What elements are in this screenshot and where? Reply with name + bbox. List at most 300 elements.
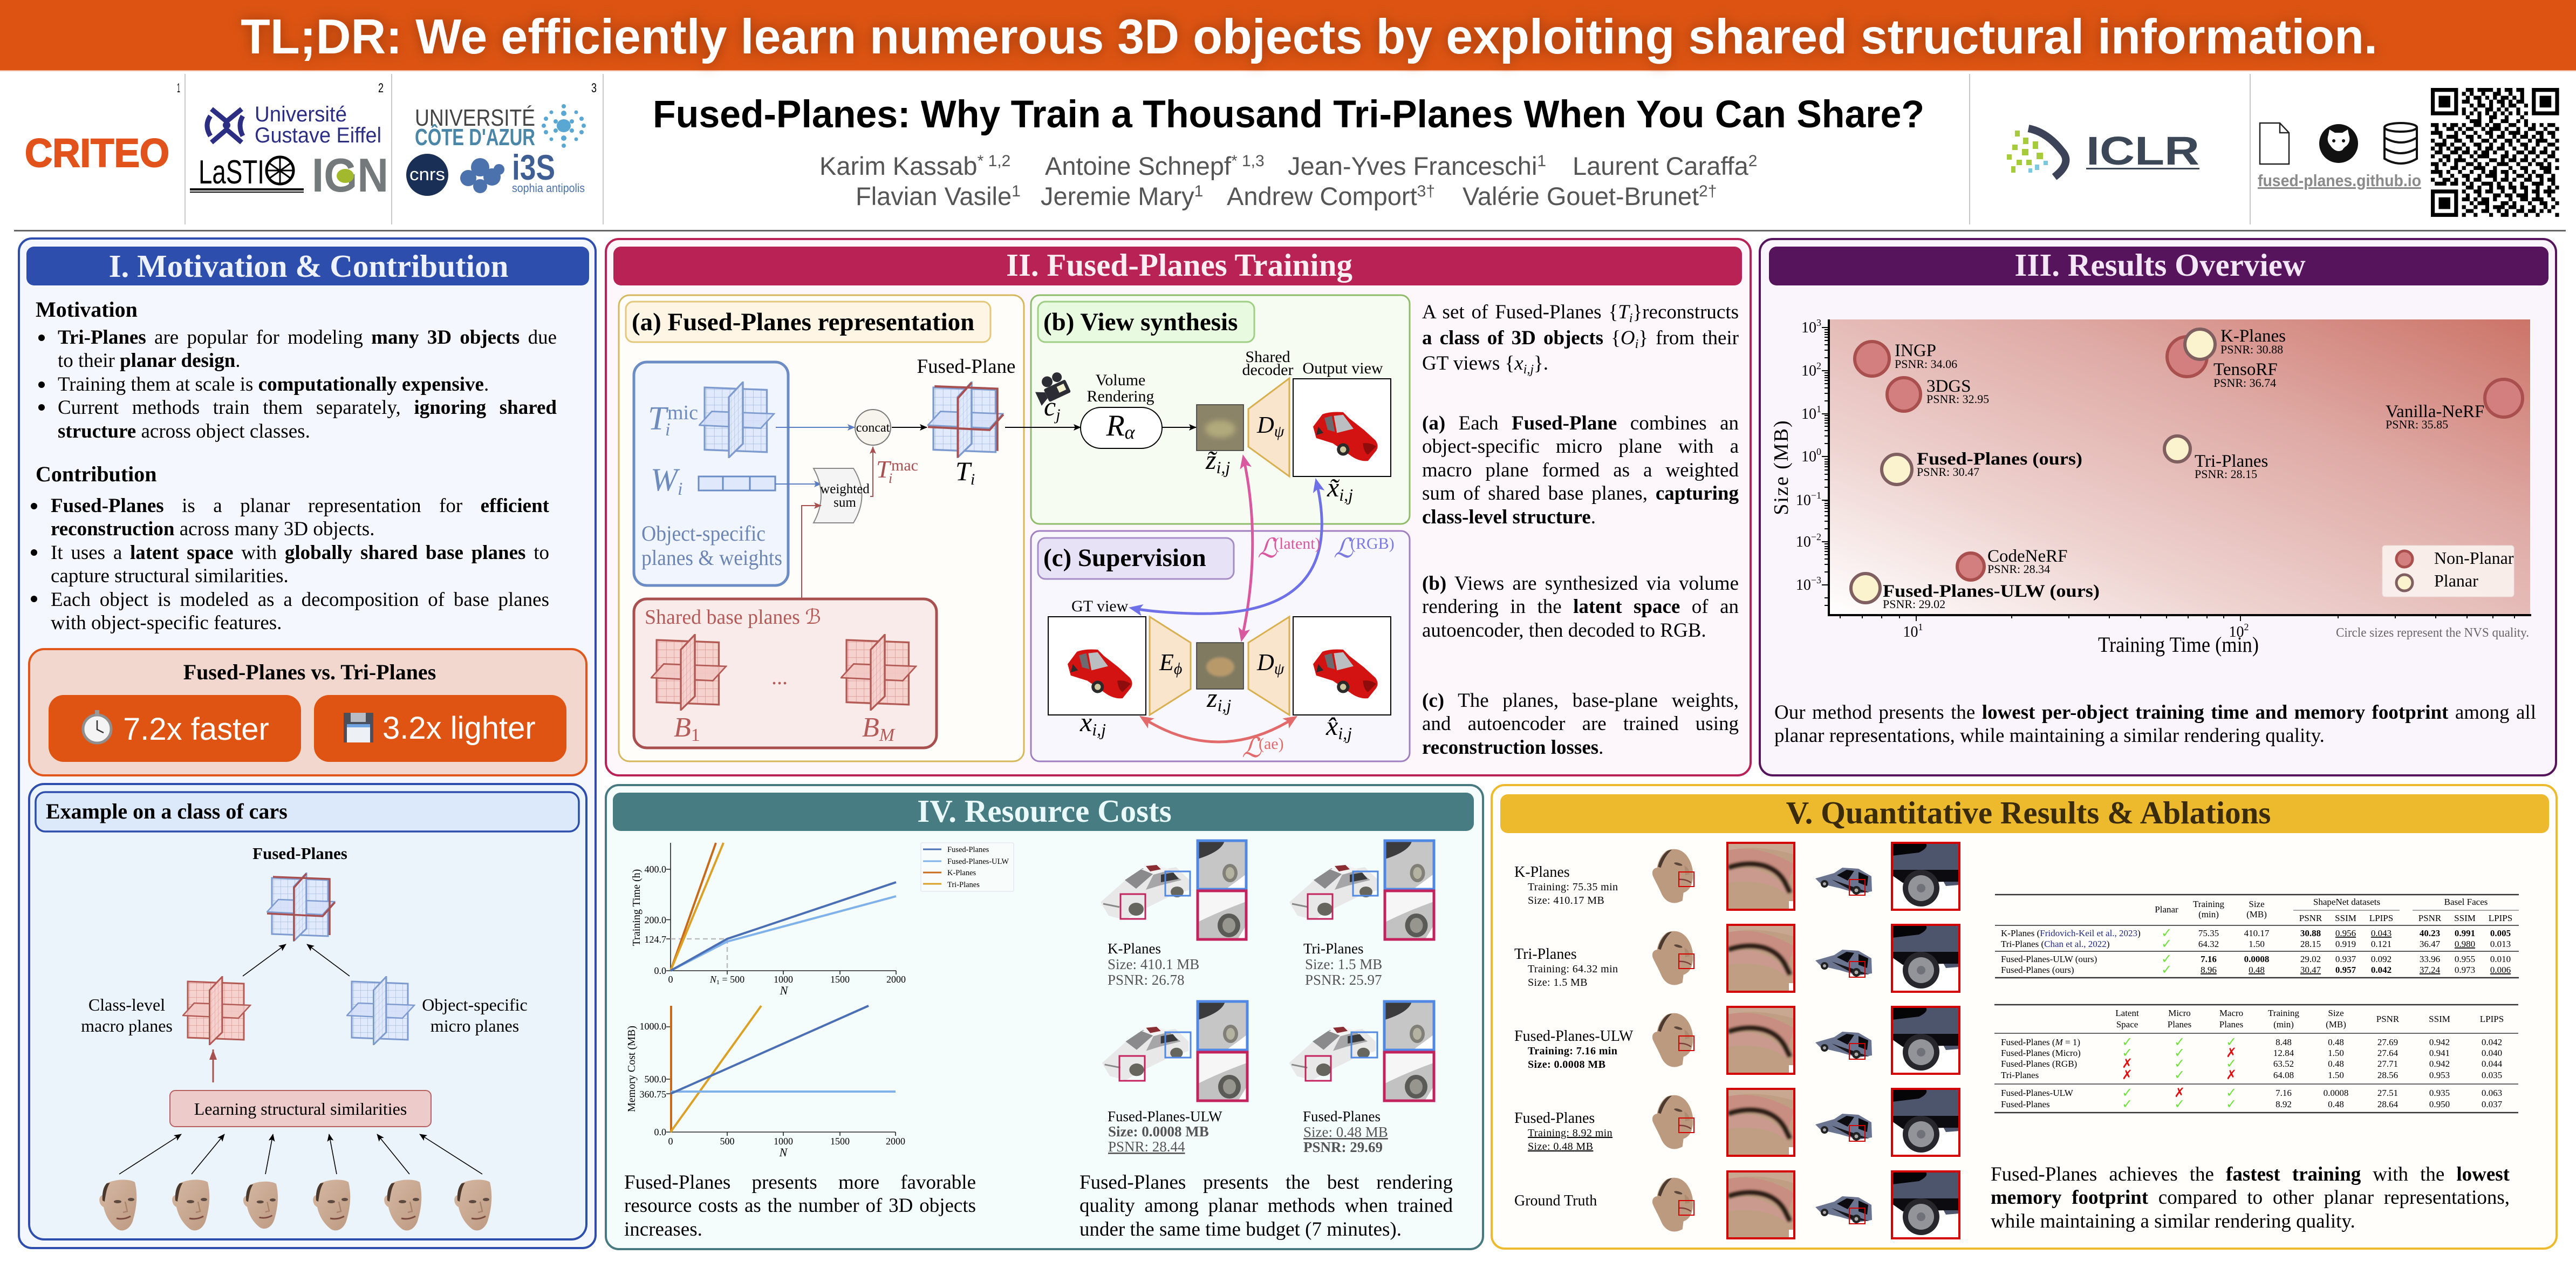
chart: training time: 200.0 (644, 915, 666, 925)
text block: contribution: It uses a latent space with globally shared base planes to (51, 542, 549, 564)
table: planar comparison: 8.96 (2201, 965, 2217, 975)
text block: rendering quality (1079, 1171, 1453, 1243)
row: Fused-Planes-ULW: Fused-Planes-ULW (1514, 1028, 1634, 1045)
box: object-specific planes and weights (634, 362, 788, 585)
text block: (a): sum of shared base planes, capturing (1422, 482, 1739, 505)
chart: memory cost: 1000 (774, 1136, 793, 1147)
arrow: base planes to sum (802, 506, 821, 598)
label: Fused-Plane: Fused-Plane (917, 356, 1015, 378)
shape: encoder (1150, 617, 1191, 715)
label: object-specific micro planes: micro planes (431, 1016, 519, 1035)
renders: Fused-Planes: PSNR: 29.69 (1303, 1139, 1383, 1155)
row: Fused-Planes: Training: 8.92 min (1528, 1127, 1612, 1139)
table: ablations: Fused-Planes-ULW (2001, 1088, 2074, 1098)
box: shared base planes: B (674, 712, 691, 743)
text block: contribution: capture structural similarities. (51, 565, 289, 587)
renders: K-Planes: K-Planes (1108, 940, 1161, 957)
scatter chart (1770, 317, 2531, 657)
table: ablations: ✗ (2226, 1045, 2237, 1060)
text block: motivation: Training them at scale is computationally expensive. (58, 373, 489, 396)
node: R alpha: α (1125, 421, 1136, 443)
table: ablations: ✓ (2226, 1056, 2237, 1071)
text block: quantitative summary: memory footprint compared to other planar representations, (1991, 1187, 2510, 1209)
x axis tick labels (1903, 622, 2249, 640)
renders: Fused-Planes-ULW: Size: 0.0008 MB (1108, 1123, 1209, 1140)
table: ablations: ✓ (2226, 1085, 2237, 1100)
label: T_i: i (971, 471, 975, 488)
text block: motivation (36, 297, 557, 446)
heading: (a): (a) Fused-Planes representation (632, 308, 974, 336)
label: object-specific micro planes: Object-specific (422, 995, 528, 1014)
y axis tick labels: 0 (1816, 446, 1821, 457)
y axis tick labels: 2 (1816, 360, 1821, 371)
label: AE loss: ℒ (1242, 733, 1262, 763)
logo: Criteo: CRITEO (25, 131, 169, 175)
chart: training time: 0 (668, 974, 673, 985)
shape: decoder (1248, 617, 1289, 715)
label: latent loss: ℒ (1258, 533, 1277, 563)
label: class-level macro planes (81, 995, 173, 1035)
box: learning structural similarities (170, 1090, 431, 1127)
box: object-specific planes and weights: mic (667, 401, 698, 424)
table: ablations: 12.84 (2273, 1048, 2294, 1058)
label: T_i: T (955, 456, 971, 486)
legend: Non-Planar (2434, 548, 2514, 568)
authors: 1 (1194, 182, 1203, 200)
authors: 1 (1012, 182, 1021, 200)
table: planar comparison: Size (2249, 899, 2265, 909)
row: Fused-Planes: Size: 0.48 MB (1528, 1141, 1593, 1153)
table: ablations: 0.941 (2429, 1048, 2450, 1058)
chart: training time: 124.7 (644, 934, 666, 945)
table: planar comparison: 28.15 (2300, 939, 2321, 949)
heading: section I: I. Motivation & Contribution (109, 248, 508, 284)
text block: (a): class-level structure. (1422, 506, 1596, 528)
text block: resource costs: Fused-Planes presents more favorable (624, 1171, 976, 1194)
text block: motivation: to their planar design. (58, 350, 241, 372)
text block: (b): autoencoder, then decoded to RGB. (1422, 619, 1706, 642)
sub-panel: (b) view synthesis (1005, 295, 1410, 524)
box: shared base planes: ... (771, 665, 788, 689)
table: ablations: 27.51 (2377, 1088, 2398, 1098)
table: planar comparison: SSIM (2335, 913, 2356, 923)
point labels: PSNR: 28.15 (2195, 467, 2257, 481)
text block: overview: a class of 3D objects {Oi} from their (1422, 327, 1739, 351)
table: planar comparison: 75.35 (2198, 928, 2219, 938)
renders: Fused-Planes-ULW: PSNR: 28.44 (1108, 1139, 1185, 1155)
table: planar comparison: Planar (2155, 904, 2178, 915)
text block: (a): macro plane formed as a weighted (1422, 459, 1739, 481)
text block: (a): object-specific micro plane with a (1422, 435, 1739, 458)
chart: training time: 0.0 (654, 965, 666, 976)
text block: quantitative summary (1991, 1163, 2510, 1235)
table: ablations: 0.037 (2482, 1099, 2503, 1109)
point labels: Fused-Planes (ours) (1917, 449, 2082, 469)
renders: Tri-Planes: Tri-Planes (1303, 940, 1364, 957)
label: latent loss: (latent) (1274, 535, 1321, 553)
table: planar comparison: 30.47 (2300, 965, 2321, 975)
table: planar comparison: 0.0008 (2244, 954, 2269, 964)
logo: Université Côte d'Azur, CNRS, I3S: UNIVERSITÉ (415, 105, 535, 131)
box: shared base planes: M (879, 725, 896, 745)
chart: memory cost: 0 (668, 1136, 673, 1147)
arrow: latent loss (1242, 458, 1253, 639)
table: planar comparison: ✓ (2161, 962, 2172, 977)
table: ablations: ✓ (2122, 1034, 2133, 1049)
icon: micro plane (347, 977, 414, 1045)
chart: training time: N (709, 974, 717, 985)
text block: contribution (31, 462, 549, 637)
heading: (a) (626, 302, 990, 342)
table: ablations: 27.64 (2377, 1048, 2399, 1058)
label: x tilde: i,j (1339, 485, 1353, 505)
text block: overview: A set of Fused-Planes {Ti}reconstructs (1422, 301, 1739, 325)
chart: memory cost: 500 (720, 1136, 735, 1147)
table: ablations: 0.063 (2482, 1088, 2502, 1098)
legend: line styles: Fused-Planes (947, 846, 989, 854)
text block: results summary: planar representations, while maintaining a similar rendering quality. (1774, 725, 2325, 747)
label: c_j: j (1054, 406, 1061, 424)
table: ablations: ✓ (2122, 1096, 2133, 1112)
button: 3.2x lighter: 3.2x lighter (382, 711, 536, 746)
text: 1 (177, 81, 180, 96)
chart: training time: 2000 (886, 974, 906, 985)
table: planar comparison: (min) (2198, 909, 2219, 919)
table: planar comparison: 0.955 (2455, 954, 2475, 964)
box: object-specific planes and weights: T (648, 400, 669, 437)
legend (2382, 546, 2514, 597)
sub-panel: (a) representation (619, 295, 1024, 761)
box: shared base planes (634, 599, 937, 748)
y axis tick labels: −2 (1811, 531, 1821, 542)
renders: Fused-Planes: Size: 0.48 MB (1303, 1124, 1388, 1140)
y axis tick labels: 1 (1816, 404, 1821, 414)
renders: Tri-Planes: Size: 1.5 MB (1305, 956, 1382, 972)
table: ablations: 64.08 (2273, 1070, 2294, 1080)
shape: encoder: ϕ (1174, 660, 1182, 678)
row: Ground Truth (1514, 1171, 1959, 1238)
text block: (b): rendering in the latent space of an (1422, 596, 1739, 618)
label: volume rendering: Volume (1096, 371, 1145, 389)
y axis tick labels: 10 (1801, 448, 1816, 465)
renders: K-Planes: PSNR: 26.78 (1108, 972, 1185, 988)
node: R alpha: R (1106, 409, 1125, 442)
text block: (c) (1422, 689, 1739, 761)
table: ablations: ✗ (2226, 1067, 2237, 1082)
table: planar comparison: 0.957 (2335, 965, 2356, 975)
logo: Université Côte d'Azur, CNRS, I3S: i3S (512, 147, 555, 187)
table: planar comparison: Basel Faces (2444, 897, 2488, 907)
node: concat: concat (856, 421, 890, 435)
point labels: TensoRF (2213, 360, 2278, 379)
x axis tick labels: 10 (2229, 624, 2244, 640)
heading: section III (1769, 247, 2548, 285)
table: planar comparison: 0.042 (2371, 965, 2391, 975)
y axis tick labels: 10 (1796, 492, 1811, 509)
table: ablations: Micro (2168, 1008, 2191, 1018)
box: shared base planes: B (862, 712, 879, 743)
table: ablations: Latent (2115, 1008, 2139, 1018)
authors: Karim Kassab (819, 152, 978, 180)
label: x tilde: x̃ (1327, 472, 1339, 502)
table: planar comparison: 0.980 (2455, 939, 2475, 949)
logo: Université Gustave Eiffel, LaSTIG, IGN: Gustave Eiffel (255, 124, 381, 147)
table: ablations: 0.042 (2482, 1037, 2502, 1047)
y axis title: Size (MB) (1770, 419, 1793, 515)
text block: results summary (1774, 701, 2536, 751)
text block: contribution: reconstruction across many 3D objects. (51, 518, 374, 540)
box: object-specific planes and weights: i (665, 420, 670, 440)
table: ablations: 8.48 (2276, 1037, 2292, 1047)
label: GT view: GT view (1071, 597, 1129, 615)
point labels: PSNR: 36.74 (2213, 376, 2276, 390)
authors: 3† (1417, 182, 1435, 200)
chart: memory cost: 1500 (830, 1136, 850, 1147)
arrow: weights to sum (775, 483, 821, 485)
shape: encoder: E (1159, 649, 1174, 676)
table: planar comparison: 0.919 (2335, 939, 2356, 949)
table: planar comparison: 30.88 (2300, 928, 2321, 938)
label: T mac: T (876, 455, 892, 483)
label: AE loss (1242, 733, 1284, 763)
heading: section II: II. Fused-Planes Training (1006, 247, 1352, 283)
point labels: PSNR: 29.02 (1883, 597, 1945, 611)
point labels (1883, 326, 2484, 611)
row: K-Planes: Size: 410.17 MB (1528, 895, 1604, 906)
y axis tick labels: 10 (1801, 406, 1816, 422)
label: RGB loss (1334, 533, 1395, 563)
table: planar comparison: PSNR (2418, 913, 2442, 923)
table: ablations: Fused-Planes (Micro) (2001, 1048, 2081, 1058)
table: ablations: LPIPS (2480, 1014, 2504, 1024)
logo: ICLR (2007, 128, 2199, 177)
box: learning structural similarities: Learning structural similarities (194, 1099, 407, 1119)
text block: resource costs (624, 1171, 976, 1243)
node: weighted sum: weighted (820, 482, 870, 496)
image: rendered latent (1197, 405, 1243, 451)
logo: Criteo (25, 81, 180, 175)
table: ablations: 0.942 (2429, 1037, 2450, 1047)
logo: Université Gustave Eiffel, LaSTIG, IGN: IGN (312, 148, 388, 202)
table: planar comparison: 1.50 (2249, 939, 2265, 949)
table: planar comparison: ✓ (2161, 936, 2172, 951)
faces (99, 1180, 491, 1230)
table: planar comparison: (MB) (2246, 909, 2267, 919)
node: weighted sum (814, 468, 870, 523)
QR code (2431, 90, 2559, 215)
table: ablations (1994, 1005, 2518, 1113)
table: ablations: 28.64 (2377, 1099, 2399, 1109)
image: reconstructed car (1293, 617, 1391, 715)
panel: III. Results Overview (1760, 239, 2556, 775)
table: ablations: 8.92 (2276, 1099, 2292, 1109)
table: ablations: 0.48 (2328, 1099, 2344, 1109)
arrow: micro to concat (776, 427, 855, 428)
text block: (b) (1422, 572, 1739, 644)
text block: contribution: with object-specific features. (51, 612, 282, 634)
chart: memory cost: 500.0 (644, 1074, 666, 1085)
arrow head (209, 1049, 217, 1060)
point labels: PSNR: 34.06 (1895, 357, 1957, 371)
legend: line styles (921, 843, 1014, 891)
text block: results summary: Our method presents the lowest per-object training time and memory footprint among all (1774, 701, 2536, 724)
label: shared decoder (1242, 348, 1293, 379)
y axis tick labels: 10 (1796, 577, 1811, 594)
table: planar comparison: ShapeNet datasets (2313, 897, 2380, 907)
text block: (b): (b) Views are synthesized via volume (1422, 572, 1739, 595)
text block: overview: GT views {xi,j}. (1422, 352, 1548, 377)
table: planar comparison: 37.24 (2420, 965, 2441, 975)
point labels: PSNR: 30.88 (2220, 343, 2283, 356)
chart: training time: 1 (716, 978, 720, 986)
table: ablations: (min) (2273, 1019, 2294, 1030)
table: planar comparison: 0.043 (2371, 928, 2391, 938)
renders: Fused-Planes (1289, 1001, 1434, 1155)
row: Tri-Planes: Size: 1.5 MB (1528, 977, 1588, 989)
table: planar comparison: 0.991 (2455, 928, 2475, 938)
x axis title: Training Time (min) (2098, 632, 2259, 657)
table: ablations: ✓ (2226, 1034, 2237, 1049)
text block: motivation: Tri-Planes are popular for modeling many 3D objects due (58, 326, 557, 349)
label: class-level macro planes: macro planes (81, 1016, 173, 1035)
note: circle sizes: Circle sizes represent the NVS quality. (2336, 626, 2529, 640)
arrow: RGB loss (1132, 481, 1322, 614)
label: x_ij: i,j (1092, 720, 1106, 739)
TL;DR banner (0, 0, 2576, 71)
logo: Université Gustave Eiffel, LaSTIG, IGN (190, 81, 388, 202)
table: planar comparison: Fused-Planes-ULW (ours) (2001, 954, 2097, 964)
table: planar comparison: Tri-Planes (Chan et al., 2022) (2001, 939, 2109, 949)
label: class-level macro planes: Class-level (88, 995, 165, 1014)
chart: memory cost: 0.0 (654, 1127, 666, 1137)
header dividers and rule (185, 74, 2250, 224)
point labels: K-Planes (2220, 326, 2286, 346)
label: Fused-Planes: Fused-Planes (252, 844, 347, 863)
table: ablations: ✓ (2174, 1045, 2185, 1060)
table: planar comparison: LPIPS (2489, 913, 2512, 923)
panel: example on a class of cars (29, 784, 586, 1239)
chart: memory cost: 2000 (886, 1136, 905, 1147)
non-planar points (1855, 337, 2523, 580)
row: K-Planes: K-Planes (1514, 864, 1570, 881)
label: RGB loss: ℒ (1334, 533, 1354, 563)
point labels: PSNR: 35.85 (2386, 418, 2448, 431)
heading: section IV (613, 793, 1474, 831)
table: ablations: 0.942 (2429, 1059, 2450, 1069)
text block: (c): reconstruction losses. (1422, 737, 1603, 759)
y axis tick labels: −1 (1811, 490, 1821, 501)
table: planar comparison: 0.48 (2249, 965, 2265, 975)
image: GT view car (1048, 617, 1146, 715)
point labels: 3DGS (1926, 377, 1971, 396)
text block: rendering quality: Fused-Planes presents the best rendering (1079, 1171, 1453, 1194)
text block: overview (1422, 299, 1739, 378)
authors: Laurent Caraffa (1573, 152, 1748, 180)
text block: contribution: Contribution (36, 462, 156, 486)
icon: macro plane (183, 977, 250, 1045)
table: planar comparison: 33.96 (2420, 954, 2440, 964)
point labels: Tri-Planes (2195, 452, 2268, 471)
arrow: concat to plane (892, 427, 927, 428)
arrow: renderer to latent (1162, 427, 1196, 428)
authors: Jeremie Mary (1041, 182, 1194, 210)
image: output view car (1293, 379, 1391, 476)
button: 3.2x lighter (314, 695, 566, 762)
table: ablations: ✓ (2122, 1045, 2133, 1060)
project link: fused-planes.github.io (2258, 171, 2421, 190)
table: planar comparison: 40.23 (2420, 928, 2440, 938)
sub-panel: (c) supervision (1031, 531, 1410, 761)
icon: github (2319, 124, 2358, 163)
table: planar comparison: 0.010 (2490, 954, 2511, 964)
chart: training time: 1500 (830, 974, 850, 985)
callout: Fused-Planes vs. Tri-Planes (29, 649, 586, 775)
authors: Andrew Comport (1227, 182, 1417, 210)
chart: memory cost: Memory Cost (MB) (626, 1026, 638, 1112)
x axis tick labels: 1 (1918, 622, 1923, 632)
table: planar comparison: 0.013 (2490, 939, 2511, 949)
callout: Fused-Planes vs. Tri-Planes: Fused-Planes vs. Tri-Planes (183, 660, 436, 684)
table: planar comparison: 7.16 (2201, 954, 2217, 964)
table: planar comparison: 29.02 (2300, 954, 2321, 964)
table: ablations: 7.16 (2276, 1088, 2292, 1098)
renders: Tri-Planes (1289, 841, 1434, 988)
authors: * 1,2 (978, 152, 1010, 170)
table: ablations: 1.50 (2328, 1048, 2344, 1058)
text block: (c): (c) The planes, base-plane weights, (1422, 690, 1739, 712)
logo: Université Côte d'Azur, CNRS, I3S: 3 (591, 81, 597, 96)
table: ablations: ✓ (2226, 1096, 2237, 1112)
label: output view: Output view (1302, 359, 1383, 377)
label: T mac (876, 455, 918, 486)
icon: fused plane (928, 382, 1003, 458)
table: planar comparison: ✓ (2161, 951, 2172, 966)
y axis tick labels: 3 (1816, 317, 1821, 328)
label: AE loss: (ae) (1259, 735, 1284, 753)
table: ablations: 63.52 (2273, 1059, 2294, 1069)
row: Tri-Planes (1514, 925, 1959, 992)
table: planar comparison: PSNR (2299, 913, 2322, 923)
table: planar comparison: 0.973 (2455, 965, 2475, 975)
authors: Antoine Schnepf (1045, 152, 1231, 180)
table: planar comparison: 0.956 (2335, 928, 2356, 938)
heading: section IV: IV. Resource Costs (917, 793, 1172, 829)
table: ablations: 0.035 (2482, 1070, 2502, 1080)
table: planar comparison: LPIPS (2369, 913, 2393, 923)
panel: V. Quantitative Results & Ablations (1492, 785, 2557, 1249)
logo: ICLR: ICLR (2086, 128, 2199, 173)
text block: resource costs: resource costs as the number of 3D objects (624, 1195, 976, 1217)
chart: training time: N (780, 984, 789, 997)
heading: section V: V. Quantitative Results & Ablations (1786, 795, 2271, 830)
heading: (c): (c) Supervision (1043, 544, 1206, 572)
shape: decoder: ψ (1274, 422, 1285, 440)
heading: section III: III. Results Overview (2014, 247, 2306, 283)
heading: example (36, 792, 579, 831)
table: ablations: 0.044 (2482, 1059, 2503, 1069)
text block: motivation: Motivation (36, 297, 138, 322)
chart: memory cost: 1000.0 (640, 1021, 666, 1032)
table: planar comparison: 64.32 (2198, 939, 2219, 949)
arrow: AE loss (1142, 718, 1295, 742)
table: planar comparison: 410.17 (2244, 928, 2270, 938)
chart: training time: Training Time (h) (631, 869, 643, 946)
legend: line styles: Fused-Planes-ULW (947, 857, 1009, 866)
table: ablations: Fused-Planes (RGB) (2001, 1059, 2077, 1069)
label: object-specific micro planes (422, 995, 528, 1035)
table: ablations: 1.50 (2328, 1070, 2344, 1080)
label: z_ij: i,j (1217, 696, 1231, 715)
